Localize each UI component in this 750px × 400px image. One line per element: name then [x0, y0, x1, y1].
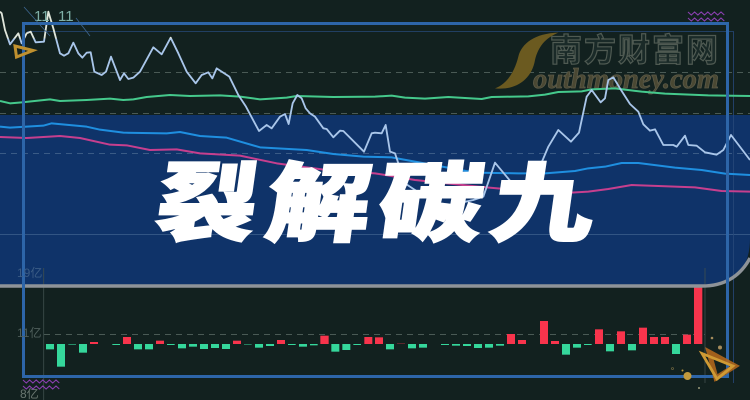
title — [150, 156, 601, 253]
chart grid lines — [0, 72, 750, 334]
moving average: blue — [0, 123, 750, 175]
moving average: pink — [0, 136, 750, 193]
title character: 裂: 裂 — [150, 156, 264, 252]
decorative tick marks — [24, 7, 90, 36]
icon: gold triangle top left — [15, 46, 33, 57]
watermark swoosh — [495, 33, 558, 89]
title character: 九: 九 — [485, 157, 601, 253]
icon: gold triangle bottom right — [702, 352, 735, 379]
icon: purple zigzag bottom left — [23, 380, 59, 389]
panel border: grey curve — [0, 258, 750, 286]
moving average: green — [0, 88, 750, 103]
label: 11 11: 11 — [34, 8, 50, 25]
volume bars — [46, 286, 702, 367]
panel: blue title band — [0, 115, 750, 286]
top axis numbers — [24, 7, 90, 36]
label: 11 11: 11 — [58, 8, 74, 25]
label: 19亿: 19亿 — [17, 265, 42, 280]
watermark domain: outhmoney.com — [533, 64, 719, 95]
axis labels — [17, 265, 42, 400]
watermark chinese name: 南方财富网 — [550, 32, 718, 68]
volume bars: green — [46, 344, 680, 367]
volume axis lines — [44, 268, 705, 400]
icon: purple zigzag top right — [688, 12, 724, 21]
icon: gold dots — [672, 337, 722, 389]
volume bars: red — [90, 286, 702, 344]
title character: 碳: 碳 — [372, 157, 490, 253]
price line chart — [0, 12, 750, 203]
label: 11亿: 11亿 — [17, 325, 41, 340]
watermark: Southmoney logo — [495, 32, 719, 95]
title character: 解: 解 — [260, 157, 378, 253]
